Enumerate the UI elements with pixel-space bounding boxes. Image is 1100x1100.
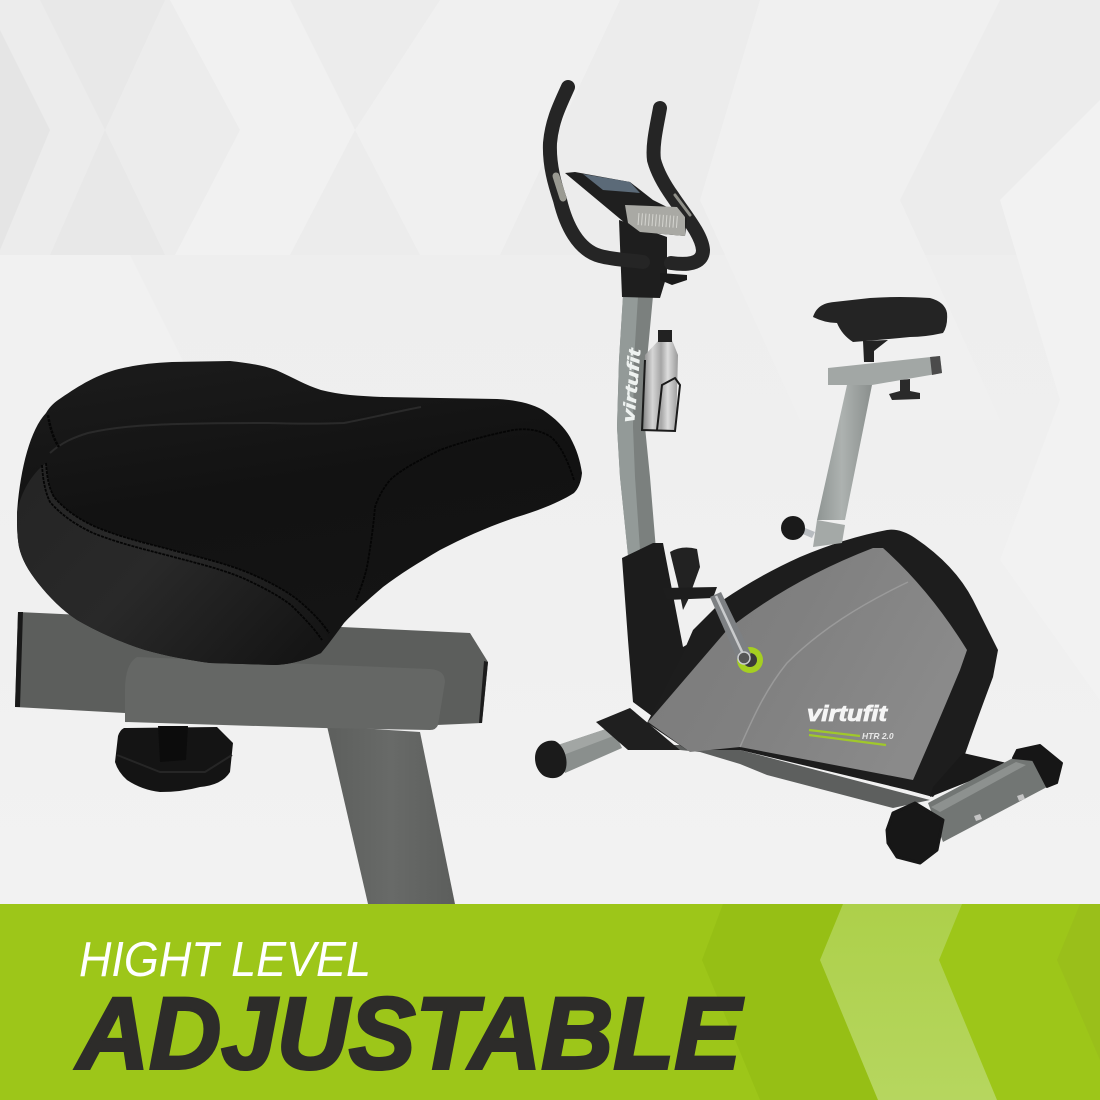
bracket front plate (125, 657, 445, 730)
bike black column housing (622, 543, 695, 722)
rear seat post (817, 385, 872, 520)
bike brand on column: virtufit (619, 346, 645, 423)
heading line: adjustable: ADJUSTABLE (74, 976, 744, 1090)
crank hub (737, 647, 763, 673)
seat post collar and knob (781, 516, 845, 547)
housing logo: virtufit (807, 701, 889, 726)
console (565, 172, 687, 236)
rear end cap (1013, 745, 1062, 787)
bike rear base tube (887, 745, 1062, 863)
crank and pedal (662, 548, 763, 673)
bike seat bracket (828, 356, 942, 400)
housing seam line (740, 582, 908, 747)
bike rear foot (930, 753, 1007, 797)
housing grey panel (648, 548, 967, 780)
saddle lower side panel (17, 463, 329, 665)
saddle stem (863, 340, 888, 362)
console and handlebars (550, 87, 703, 298)
console silver panel (625, 205, 685, 236)
housing model label: HTR 2.0 (862, 731, 894, 741)
console screen (583, 174, 640, 193)
horizontal seat bracket (15, 612, 488, 730)
console stem (619, 220, 667, 298)
handlebars (550, 87, 703, 264)
adjustment knob (115, 726, 233, 792)
heading line: hight level: HIGHT LEVEL (79, 933, 371, 987)
seat post (327, 726, 455, 904)
bike lower frame (630, 745, 930, 808)
water bottle and holder (642, 330, 680, 431)
large seat post detail (15, 612, 488, 904)
grip knob (660, 273, 687, 285)
pedal strap (670, 548, 700, 610)
green banner (0, 904, 1100, 1100)
pedal (662, 587, 717, 600)
front end cap (887, 803, 943, 863)
bike saddle (813, 297, 947, 342)
bike front base tube (535, 708, 680, 778)
bike upright column (617, 296, 656, 555)
crank arm (710, 592, 751, 663)
saddle creases and stitching (42, 407, 574, 640)
large saddle (17, 361, 582, 665)
bike flywheel housing (647, 530, 998, 797)
housing green lines (809, 730, 886, 745)
exercise bike (535, 87, 1062, 863)
banner light chevron (820, 904, 997, 1100)
console panel slots (638, 219, 678, 222)
